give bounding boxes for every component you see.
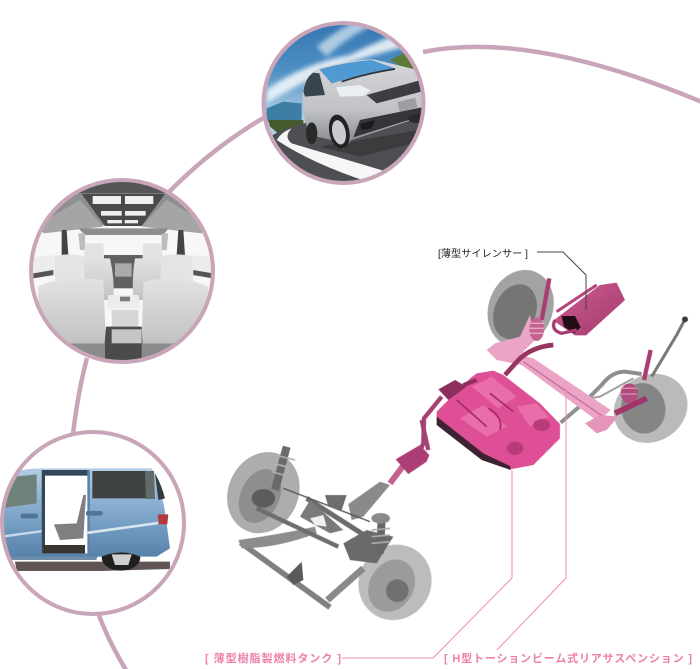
- photo: blue minivan with sliding door open: [0, 425, 190, 615]
- steering and arms: [257, 508, 338, 547]
- rear left wheel: [476, 260, 565, 357]
- leader line: fuel tank: [342, 470, 512, 658]
- front pipe and muffler: [390, 463, 405, 483]
- rear pipe: [505, 345, 553, 375]
- centre muffler: [438, 380, 467, 400]
- catalyst: [348, 482, 390, 520]
- leader line: rear suspension: [497, 388, 566, 650]
- front left wheel: [214, 440, 313, 545]
- label: silencer: [薄型サイレンサー ]: [438, 247, 528, 260]
- label: rear suspension: [ H型トーションビーム式リアサスペンション ]: [444, 651, 692, 665]
- front right wheel: [345, 531, 445, 634]
- rear right wheel: [601, 360, 700, 456]
- chassis: rear axle, tank and silencer: [420, 260, 700, 470]
- label: fuel tank: [ 薄型樹脂製燃料タンク ]: [205, 651, 341, 665]
- leader line: silencer: [537, 252, 586, 310]
- torsion beam: [487, 315, 611, 422]
- dampers: [542, 278, 549, 320]
- subframe: [241, 543, 330, 607]
- chassis: front axle: [214, 420, 445, 634]
- photo: interior seats: [29, 178, 215, 364]
- struts: [252, 447, 295, 508]
- photo: minivan on road: [262, 21, 426, 185]
- silencer: [553, 283, 625, 335]
- gray tail pipe: [561, 372, 642, 423]
- fuel tank: [437, 371, 560, 469]
